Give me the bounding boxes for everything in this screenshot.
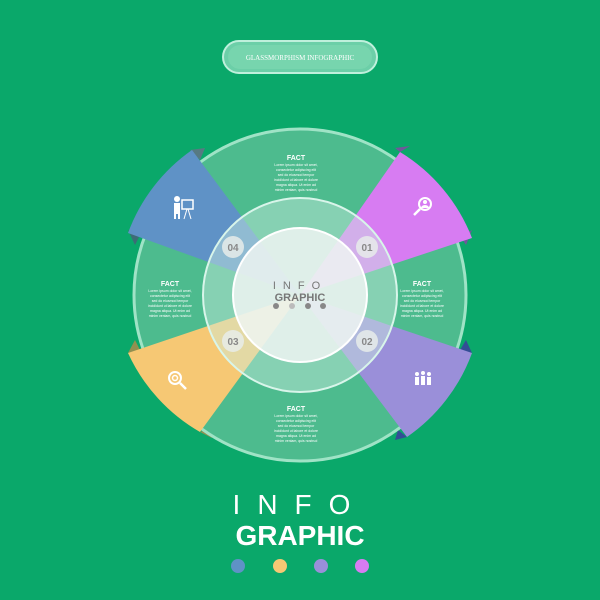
icon: presenter (blue) bbox=[174, 196, 193, 219]
fact left: Lorem ipsum dolor sit amet, bbox=[148, 289, 192, 293]
fact right bbox=[400, 281, 444, 318]
fact bottom: sed do eiusmod tempor bbox=[278, 424, 315, 428]
badge 04 bbox=[222, 236, 244, 258]
fact left: incididunt ut labore et dolore bbox=[148, 304, 192, 308]
title pill bbox=[223, 41, 377, 73]
badge 02: 02 bbox=[361, 337, 373, 348]
fact left: FACT bbox=[161, 281, 180, 288]
fact bottom: Lorem ipsum dolor sit amet, bbox=[274, 414, 318, 418]
fact top: incididunt ut labore et dolore bbox=[274, 178, 318, 182]
fact top: Lorem ipsum dolor sit amet, bbox=[274, 163, 318, 167]
fact left: magna aliqua. Ut enim ad bbox=[150, 309, 190, 313]
fact bottom: FACT bbox=[287, 406, 306, 413]
center circle: GRAPHIC bbox=[275, 292, 325, 304]
badge 02 bbox=[356, 330, 378, 352]
fact left: consectetur adipiscing elit bbox=[150, 294, 190, 298]
fact top: FACT bbox=[287, 155, 306, 162]
fact bottom bbox=[274, 406, 318, 443]
fact right: magna aliqua. Ut enim ad bbox=[402, 309, 442, 313]
fact right: sed do eiusmod tempor bbox=[404, 299, 441, 303]
icon: search person (purple) bbox=[414, 198, 431, 215]
outer glass disk bbox=[134, 129, 466, 461]
center circle: INFO bbox=[273, 280, 327, 292]
center circle bbox=[233, 228, 367, 362]
fact left bbox=[148, 281, 192, 318]
fact top bbox=[274, 155, 318, 192]
badge 01 bbox=[356, 236, 378, 258]
fact top: consectetur adipiscing elit bbox=[276, 168, 316, 172]
middle glass ring bbox=[203, 198, 397, 392]
bottom title: GRAPHIC bbox=[235, 520, 365, 551]
fact right: minim veniam, quis nostrud bbox=[401, 314, 443, 318]
fact bottom: consectetur adipiscing elit bbox=[276, 419, 316, 423]
icon: team (lavender) bbox=[415, 371, 431, 385]
wedge: 02 lavender bbox=[300, 295, 472, 437]
fact bottom: minim veniam, quis nostrud bbox=[275, 439, 317, 443]
fact right: FACT bbox=[413, 281, 432, 288]
wedge: 03 yellow bbox=[128, 295, 300, 432]
fact left: sed do eiusmod tempor bbox=[152, 299, 189, 303]
bottom title: INFO bbox=[233, 489, 367, 520]
wedge shadows bbox=[128, 146, 472, 440]
fact right: incididunt ut labore et dolore bbox=[400, 304, 444, 308]
bottom title bbox=[233, 489, 367, 551]
badge 01: 01 bbox=[361, 243, 373, 254]
badge 03 bbox=[222, 330, 244, 352]
fact left: minim veniam, quis nostrud bbox=[149, 314, 191, 318]
fact top: magna aliqua. Ut enim ad bbox=[276, 183, 316, 187]
icon: gear search (yellow) bbox=[169, 372, 186, 389]
color dots legend bbox=[231, 559, 369, 573]
fact top: sed do eiusmod tempor bbox=[278, 173, 315, 177]
fact bottom: incididunt ut labore et dolore bbox=[274, 429, 318, 433]
badge 03: 03 bbox=[227, 337, 239, 348]
title pill: GLASSMORPHISM INFOGRAPHIC bbox=[246, 54, 354, 62]
fact right: consectetur adipiscing elit bbox=[402, 294, 442, 298]
fact top: minim veniam, quis nostrud bbox=[275, 188, 317, 192]
fact bottom: magna aliqua. Ut enim ad bbox=[276, 434, 316, 438]
wedge: 04 blue bbox=[128, 150, 300, 295]
badge 04: 04 bbox=[227, 243, 239, 254]
fact right: Lorem ipsum dolor sit amet, bbox=[400, 289, 444, 293]
wedge: 01 purple bbox=[300, 152, 472, 295]
